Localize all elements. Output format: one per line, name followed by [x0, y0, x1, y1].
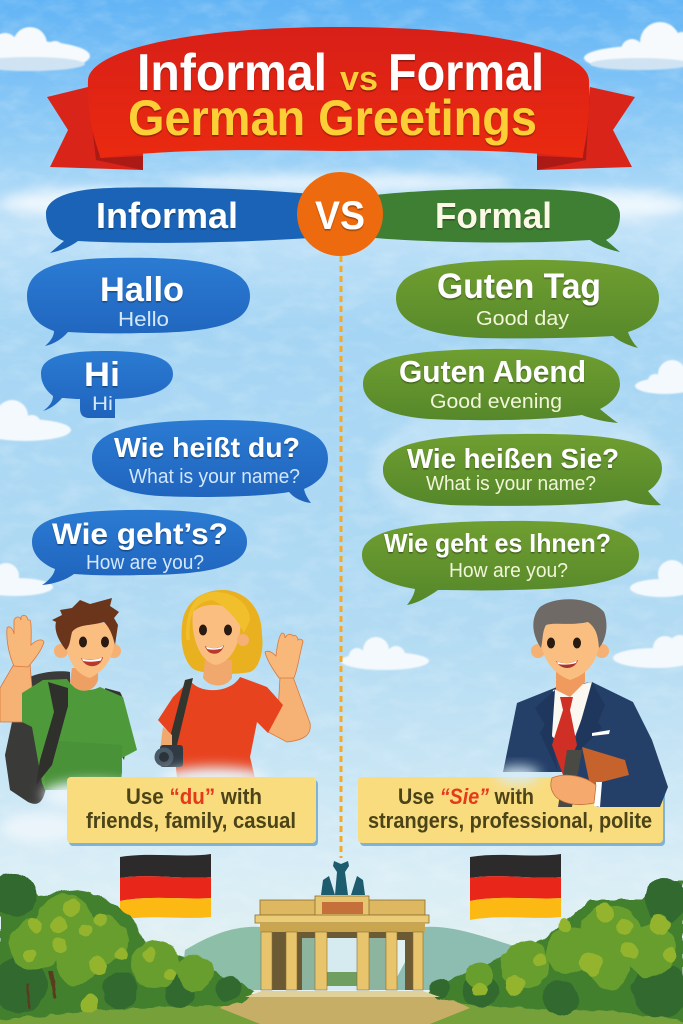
character: boy waving	[0, 598, 137, 804]
grey hair	[533, 599, 606, 648]
eyes	[547, 638, 555, 648]
bubble: Hi: Hi	[84, 356, 120, 394]
title text: vs	[340, 60, 378, 98]
title text	[128, 44, 544, 146]
note: Sie: Use “Sie” with	[398, 784, 534, 809]
bubble: Wie heißt du?: What is your name?	[129, 466, 300, 488]
title text: Informal	[137, 44, 327, 102]
bubble: Wie heißt du?	[92, 420, 328, 503]
left arm	[160, 727, 172, 750]
bubble: Wie geht es Ihnen?: Wie geht es Ihnen?	[384, 528, 611, 558]
eyes	[199, 624, 207, 636]
dashed centre line	[340, 256, 342, 858]
bubble: Guten Tag: Good day	[476, 308, 569, 330]
shirt	[550, 682, 592, 750]
cloud: top right	[584, 22, 683, 70]
cloud: mid left	[0, 400, 71, 441]
smile	[81, 657, 103, 666]
bubble: Hallo: Hello	[118, 309, 169, 331]
cloud: lower right	[630, 560, 683, 597]
hills	[180, 927, 520, 990]
quadriga	[321, 861, 365, 895]
pocket square	[592, 730, 610, 736]
bubble: Hallo	[27, 258, 250, 346]
bubble: Wie geht's?	[32, 510, 247, 585]
bubble: Hi	[41, 351, 173, 418]
lapels	[535, 690, 558, 772]
hair	[52, 598, 119, 650]
columns	[261, 932, 423, 990]
flag left	[120, 854, 211, 920]
smile	[205, 645, 224, 654]
cloud: centre	[341, 637, 429, 670]
bubble: Wie heißen Sie?: What is your name?	[426, 473, 596, 495]
entablature	[255, 915, 429, 923]
title banner	[47, 27, 635, 170]
view through arch	[327, 938, 357, 990]
bubble: Guten Tag: Guten Tag	[437, 267, 601, 306]
bubble: Guten Abend: Good evening	[430, 391, 562, 413]
bubble: Hallo: Hallo	[100, 271, 184, 309]
steps	[245, 991, 440, 997]
ears	[531, 644, 545, 658]
attic	[260, 900, 425, 915]
green shirt	[22, 679, 137, 790]
smile	[556, 660, 578, 668]
header: Informal: Informal	[96, 195, 238, 236]
ribbon tail right	[537, 87, 635, 170]
header: Formal	[375, 189, 620, 252]
bubble: Guten Tag	[396, 260, 659, 348]
bubble: Wie geht's?: How are you?	[86, 552, 204, 574]
tie	[552, 697, 577, 775]
header: Formal: Formal	[435, 195, 552, 236]
VS badge: VS	[315, 194, 365, 238]
face	[66, 621, 114, 678]
mist under businessman	[496, 766, 540, 784]
hand and cuff	[594, 782, 602, 807]
face	[193, 605, 240, 665]
bubble: Wie heißen Sie?: Wie heißen Sie?	[407, 443, 619, 474]
flag right	[470, 854, 561, 920]
bubble: Wie geht es Ihnen?: How are you?	[449, 560, 568, 582]
eyes	[79, 636, 87, 648]
cloud: mid right	[635, 360, 683, 394]
suit	[503, 682, 668, 807]
bubble: Wie heißen Sie?	[383, 434, 662, 506]
mist under characters left	[0, 767, 270, 844]
neck	[203, 660, 232, 686]
trees right	[428, 878, 683, 1020]
cloud: far right	[613, 635, 683, 668]
title text: Formal	[388, 44, 544, 102]
camera strap	[168, 678, 193, 745]
bubble: Wie geht es Ihnen?	[362, 521, 639, 605]
bubble: Wie heißt du?: Wie heißt du?	[114, 432, 300, 463]
bubble: Wie geht's?: Wie geht’s?	[52, 518, 228, 551]
backpack	[5, 671, 70, 804]
book	[582, 747, 629, 785]
fringe	[186, 592, 250, 640]
camera	[154, 745, 183, 767]
title text: German Greetings	[128, 90, 537, 146]
Brandenburg Gate	[245, 861, 440, 997]
forearm and hand	[268, 677, 310, 742]
banner body	[88, 27, 589, 158]
trees left	[0, 873, 255, 1020]
bubble: Hi: Hi	[92, 394, 113, 415]
note: du	[67, 777, 318, 846]
dark inner	[268, 932, 420, 940]
ears	[54, 644, 68, 658]
cloud: lower left	[0, 563, 53, 596]
hand	[7, 615, 44, 667]
face	[540, 615, 600, 680]
note: du: Use “du” with	[126, 784, 262, 809]
note: du: friends, family, casual	[86, 808, 296, 833]
bubble: Guten Abend	[363, 349, 620, 423]
neck	[70, 668, 98, 691]
character: girl waving	[154, 590, 310, 778]
VS badge	[297, 172, 383, 256]
bubble: Guten Abend: Guten Abend	[399, 354, 586, 389]
ground	[0, 994, 683, 1024]
note: Sie: strangers, professional, polite	[368, 808, 652, 833]
cloud: top left	[0, 27, 90, 71]
character: businessman	[503, 599, 668, 807]
raised arm	[0, 664, 33, 722]
backpack strap	[36, 682, 68, 785]
red shirt	[158, 677, 283, 778]
back hair	[181, 590, 262, 674]
header: Informal	[46, 187, 310, 253]
neck	[556, 665, 585, 697]
ribbon tail left	[47, 87, 143, 170]
note: Sie	[358, 777, 665, 846]
